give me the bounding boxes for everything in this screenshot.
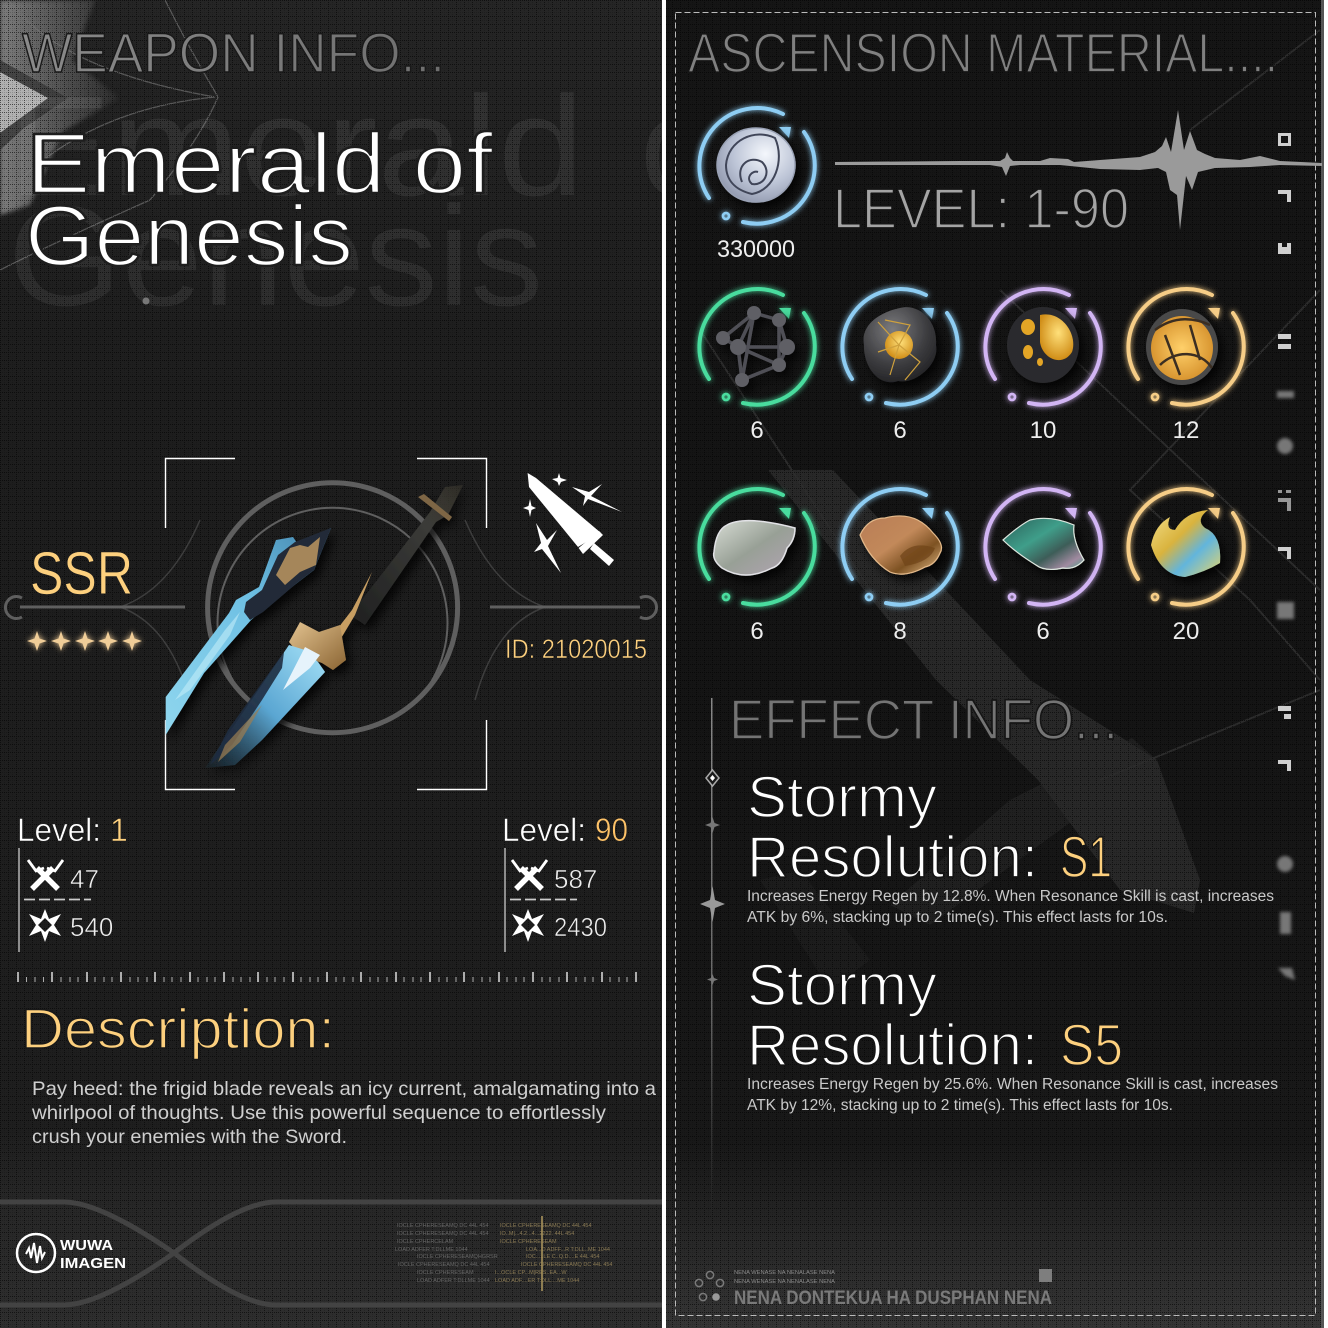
effect timeline <box>700 698 725 1218</box>
ruler scale <box>18 972 636 982</box>
icon: rating star <box>29 909 61 942</box>
five star rating <box>27 631 142 651</box>
icon: coin <box>717 128 795 202</box>
right sword blade and hilt <box>205 485 463 768</box>
level range: LEVEL: 1-90 <box>833 177 1129 241</box>
weapon image: sword <box>166 485 463 768</box>
icon: attack <box>512 860 547 889</box>
decorative code text: IOCLE CPHERESEAM <box>417 1270 474 1276</box>
item: amber egg: 12 <box>1173 417 1199 444</box>
level 1 stats: 47 <box>70 864 99 894</box>
material: shell credit: 330000 <box>717 236 795 263</box>
logo: wuwa imagen: WUWA <box>60 1237 113 1254</box>
decorative code text: LOAD ADF....ER T:DLL....ME 1044 <box>495 1278 579 1284</box>
item: silver liquid: 6 <box>750 618 764 645</box>
item: flame crystal: 20 <box>1173 618 1199 645</box>
description text <box>31 1078 656 1148</box>
item: copper liquid: 8 <box>893 618 907 645</box>
section heading: effect info: EFFECT INFO... <box>729 688 1118 752</box>
logo: wuwa imagen <box>17 1234 126 1272</box>
panel: materials and effects <box>666 0 1324 1328</box>
left blade fragment <box>166 528 331 735</box>
decorative code text: IOCLE CPHERCELAM <box>397 1239 454 1245</box>
material row 2 <box>699 289 1244 444</box>
effect S1: ATK by 6%, stacking up to 2 time(s). This effect lasts for 10s. <box>747 909 1168 926</box>
decorative code text: IOCLE CPHERESEAM <box>500 1239 557 1245</box>
weapon title <box>25 117 493 284</box>
weapon title: Genesis <box>25 189 353 284</box>
item: dark egg gold <box>985 289 1101 444</box>
ghost title <box>8 67 719 336</box>
level 90 stats <box>502 812 628 952</box>
item: amber egg <box>1128 289 1244 444</box>
background ornament lines <box>5 483 657 733</box>
description text: crush your enemies with the Sword. <box>32 1126 347 1148</box>
icon: rating star <box>512 909 544 942</box>
material: shell credit <box>699 108 815 263</box>
effect S5: Stormy <box>747 953 937 1018</box>
item: silver liquid <box>699 489 815 645</box>
effect S5 <box>747 953 1278 1114</box>
rarity: SSR: SSR <box>30 540 133 607</box>
background crossed sword shape <box>760 470 1200 990</box>
decorative code text: IO..M|...4.2...4...2222. 44L 454 <box>500 1231 574 1237</box>
effect S1: Stormy <box>747 765 937 830</box>
footer decoration <box>695 1269 1052 1309</box>
level 90 stats: 2430 <box>554 912 607 942</box>
item: iridescent liquid: 6 <box>1036 618 1050 645</box>
footer band lines <box>0 1202 662 1305</box>
effect S1 <box>747 765 1274 926</box>
effect S1: Resolution: <box>747 825 1038 890</box>
weapon title: Emerald of <box>26 117 493 212</box>
level 90 stats: 587 <box>554 864 597 894</box>
weapon id: ID: 21020015 <box>505 634 647 664</box>
decorative code text <box>395 1223 612 1284</box>
item: copper liquid <box>842 489 958 645</box>
ghost title: Emerald <box>8 67 584 226</box>
item: dark blob gold core: 6 <box>893 417 907 444</box>
decorative code text: IOCLE CPHERESEAMQ DC 44L 454 <box>397 1223 488 1229</box>
decorative code text: LOAD ADFER T:DLLME 1044 <box>395 1247 468 1253</box>
logo: wuwa imagen: IMAGEN <box>60 1255 126 1272</box>
footer decoration: NENA WENASE NA NENALASE NENA <box>734 1279 835 1285</box>
effect S5: Resolution: <box>747 1013 1038 1078</box>
item: dark egg gold: 10 <box>1030 417 1056 444</box>
level 1 stats: Level: <box>17 812 101 848</box>
waveform <box>835 110 1322 230</box>
item: flame crystal <box>1128 489 1244 645</box>
effect S5: Increases Energy Regen by 25.6%. When Resonance Skill is cast, increases <box>747 1076 1278 1093</box>
panel: weapon info <box>0 0 719 1328</box>
item: dark network <box>699 289 815 444</box>
decorative code text: IOCLE CPHERESEAMQ DC 44L 454 <box>397 1231 488 1237</box>
description text: Pay heed: the frigid blade reveals an icy current, amalgamating into a <box>32 1078 656 1100</box>
description heading: Description: <box>21 997 335 1060</box>
decorative code text: I...OCLE CP...M|RES..EA...W <box>495 1270 567 1276</box>
icon: attack <box>28 860 63 889</box>
side marks <box>1277 133 1295 980</box>
level 1 stats: 1 <box>110 812 128 848</box>
level 90 stats: Level: <box>502 812 586 848</box>
ghost title: Genesis <box>8 177 543 336</box>
decorative starburst <box>0 0 218 270</box>
description text: whirlpool of thoughts. Use this powerful sequence to effortlessly <box>31 1102 606 1124</box>
effect S1: S1 <box>1060 825 1112 890</box>
decorative code text: IOCLE CPHERESEAMQ DC 44L 454 <box>398 1262 490 1268</box>
decorative code text: LOAD ADFER T:DLLME 1044 <box>417 1278 490 1284</box>
icon: sword class <box>523 473 622 573</box>
effect S5: ATK by 12%, stacking up to 2 time(s). This effect lasts for 10s. <box>747 1097 1173 1114</box>
decorative code text: IOCLE CPHERESEAMQ DC 44L 454 <box>521 1262 612 1268</box>
item: dark network: 6 <box>750 417 764 444</box>
decorative code text: IOC.....LE C..Q.D....E 44L 454 <box>526 1254 599 1260</box>
decorative code text: LOA...D ADFF...R T:DLL..ME 1044 <box>526 1247 610 1253</box>
decorative code text: IOCLE CPHERESEAMQHGRSR <box>417 1254 498 1260</box>
footer decoration: NENA DONTEKUA HA DUSPHAN NENA <box>734 1288 1052 1309</box>
ghost title: o <box>640 67 719 226</box>
decorative code text: IOCLE CPHERESEAMQ DC 44L 454 <box>500 1223 592 1229</box>
item: iridescent liquid <box>985 489 1101 645</box>
section heading: weapon info: WEAPON INFO... <box>22 21 445 84</box>
weapon frame corners <box>166 458 486 790</box>
effect S1: Increases Energy Regen by 12.8%. When Resonance Skill is cast, increases <box>747 888 1274 905</box>
material row 3 <box>699 489 1244 645</box>
item: dark blob gold core <box>842 289 958 444</box>
level 90 stats: 90 <box>595 812 628 848</box>
effect S5: S5 <box>1060 1013 1123 1078</box>
level 1 stats <box>17 812 128 952</box>
footer decoration: NENA WENASE NA NENALASE NENA <box>734 1270 835 1276</box>
level 1 stats: 540 <box>70 912 113 942</box>
